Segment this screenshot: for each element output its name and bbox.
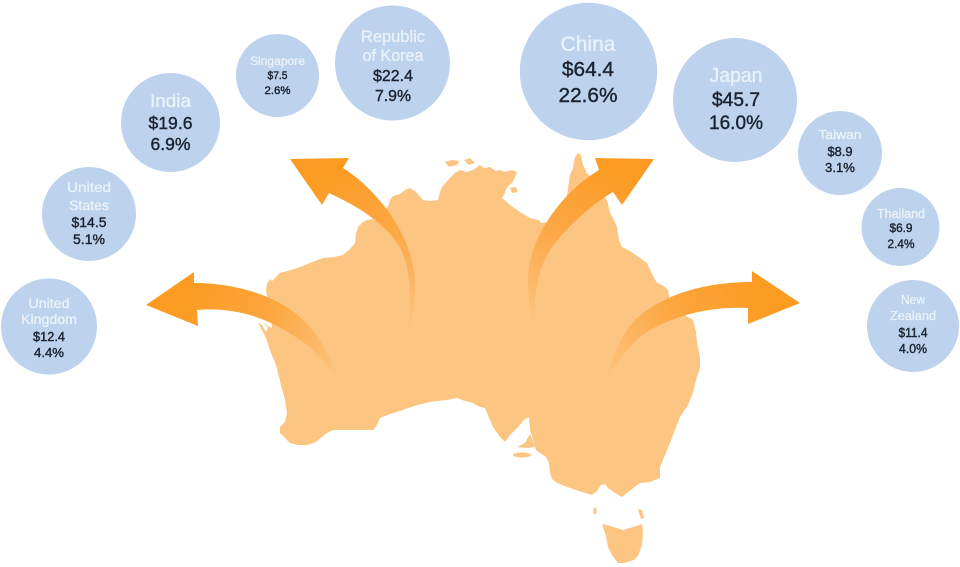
Groote Eylandt — [505, 185, 518, 193]
bubble: India: 6.9% — [150, 134, 190, 154]
bubble: Republic of Korea: of Korea — [362, 47, 424, 65]
Tasmania — [602, 524, 643, 563]
bubble: India — [121, 73, 220, 172]
arrow: to north-west — [290, 158, 415, 337]
bubble: United States: United — [67, 179, 111, 195]
arrow: to east — [604, 271, 800, 386]
bubble: Taiwan: Taiwan — [818, 128, 862, 142]
bubble: India: $19.6 — [148, 113, 192, 133]
bubble: Singapore: Singapore — [250, 54, 305, 68]
bubble: Republic of Korea: $22.4 — [373, 68, 413, 85]
bubble: United States: States — [69, 197, 109, 213]
bubble: Republic of Korea: Republic — [361, 28, 425, 46]
bubble: United Kingdom: Kingdom — [21, 312, 77, 327]
Tiwi Islands — [445, 158, 475, 167]
bubble: New Zealand: New — [901, 292, 926, 307]
bubble: Japan — [673, 38, 797, 162]
bubble: Singapore: $7.5 — [268, 70, 288, 82]
bubble: Thailand: 2.4% — [888, 237, 915, 251]
bubble: United States — [42, 167, 136, 261]
bubble: United Kingdom: United — [28, 296, 70, 311]
bubble: China: $64.4 — [562, 58, 614, 81]
bubble: New Zealand: $11.4 — [898, 326, 928, 340]
bubble: Taiwan — [798, 111, 882, 195]
bubble: China: China — [560, 33, 616, 56]
arrow: to north-east — [528, 158, 654, 328]
bubble: Japan: $45.7 — [712, 90, 760, 111]
arrow: to west — [146, 272, 340, 382]
bubble: Thailand: Thailand — [877, 207, 925, 221]
map: Australia — [258, 153, 700, 563]
bubble: China: 22.6% — [558, 84, 618, 107]
Kangaroo Island — [513, 452, 531, 458]
Yorke Peninsula — [517, 434, 535, 448]
bubble: Thailand — [862, 188, 940, 266]
bubble: Japan: Japan — [710, 65, 762, 87]
bubble: United Kingdom: $12.4 — [33, 329, 65, 344]
bubble: United States: $14.5 — [72, 214, 107, 230]
Flinders Island — [638, 509, 644, 519]
bubble: Japan: 16.0% — [709, 113, 763, 134]
mainland — [258, 153, 700, 497]
bubble: Republic of Korea — [335, 6, 450, 120]
bubble: Singapore — [236, 34, 319, 117]
bubble: United Kingdom — [1, 278, 97, 374]
bubble: United States: 5.1% — [73, 231, 105, 247]
bubble: Taiwan: 3.1% — [825, 160, 855, 175]
bubble: China — [520, 3, 657, 140]
bubble: Thailand: $6.9 — [890, 221, 913, 235]
bubble: United Kingdom: 4.4% — [34, 345, 64, 360]
bubble: India: India — [150, 91, 192, 111]
bubble: Singapore: 2.6% — [264, 85, 291, 97]
bubble: Taiwan: $8.9 — [828, 144, 852, 159]
bubble: New Zealand: 4.0% — [899, 342, 927, 356]
bubble: Republic of Korea: 7.9% — [375, 88, 411, 105]
bubble: New Zealand: Zealand — [890, 308, 936, 323]
King Island — [593, 508, 597, 514]
bubble: New Zealand — [867, 280, 959, 372]
